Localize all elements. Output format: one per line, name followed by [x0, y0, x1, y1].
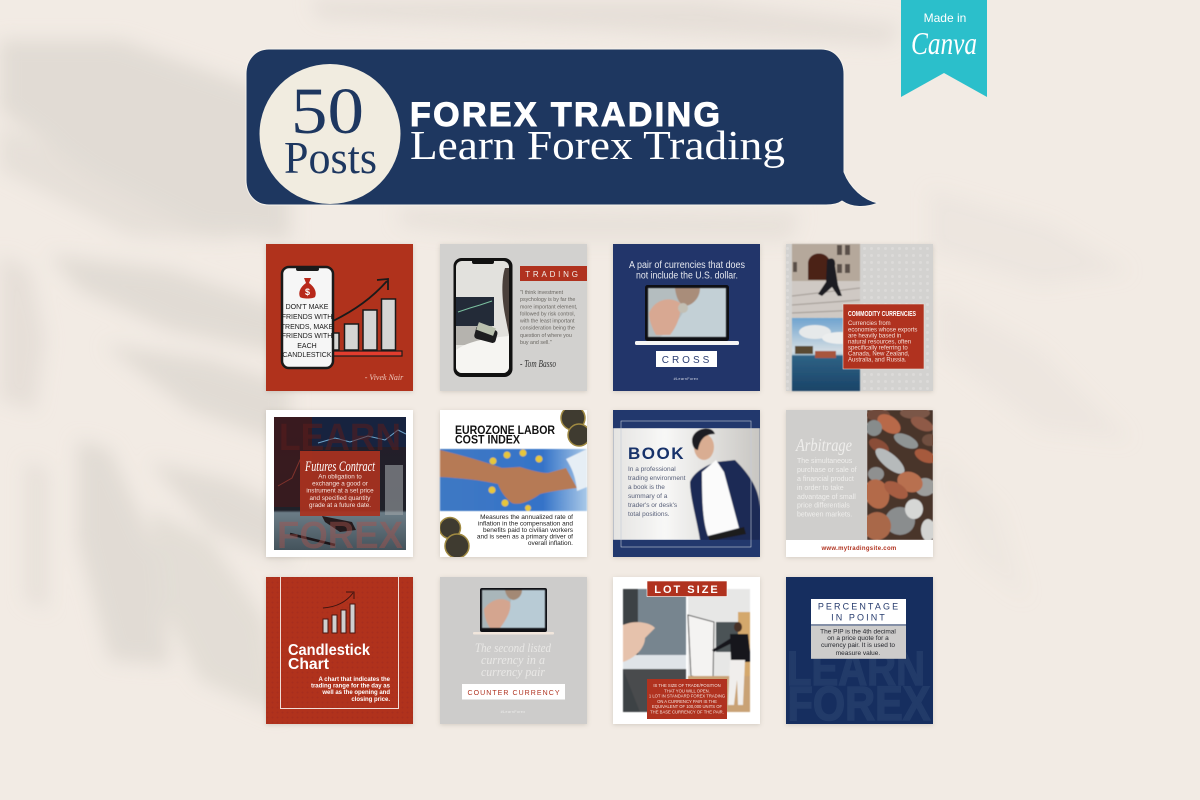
photo: businessman walking — [792, 244, 860, 318]
post 5: futures contract — [266, 410, 413, 557]
heading box — [811, 599, 906, 624]
heading: EUROZONE LABOR — [455, 425, 556, 437]
post 8: arbitrage — [786, 407, 938, 557]
definition box: Canada, New Zealand, — [848, 352, 910, 358]
bar chart with arrow — [333, 279, 402, 356]
laptop with coin photo — [635, 285, 739, 345]
phone with money bag and quote: FRIENDS WITH — [282, 314, 332, 321]
definition box: and specified quantity — [310, 495, 371, 502]
definition text: and is seen as a primary driver of — [477, 534, 573, 540]
quote text: question of where you — [520, 333, 572, 339]
post 1: candlestick advice — [266, 244, 413, 391]
heading: Candlestick — [288, 642, 370, 659]
label box: COUNTER CURRENCY — [468, 690, 560, 697]
definition box: on a price quote for a — [827, 635, 889, 642]
definition box: Futures Contract — [304, 459, 376, 475]
phone with money bag and quote — [281, 267, 334, 368]
hashtag: #LearnForex — [674, 377, 698, 381]
post 10: counter currency — [440, 577, 587, 724]
definition text: summary of a — [628, 493, 668, 500]
definition box: Australia, and Russia. — [848, 358, 907, 364]
cross label box — [656, 351, 717, 367]
heading — [455, 425, 556, 446]
definition box — [811, 624, 906, 659]
frame — [621, 421, 751, 547]
definition box: THAT YOU WILL OPEN. — [664, 688, 710, 694]
definition box: specifically referring to — [848, 346, 908, 352]
definition text — [311, 677, 391, 703]
definition text: advantage of small — [797, 494, 856, 501]
definition text: overall inflation. — [528, 540, 573, 547]
quote text: "I think investment — [520, 290, 564, 296]
post 6: eurozone labor cost index — [440, 406, 590, 558]
script definition: The second listed — [475, 640, 551, 655]
phone with money bag and quote: DON'T MAKE — [286, 304, 329, 311]
heading: COST INDEX — [455, 434, 520, 446]
photo: presenter at flip chart — [688, 589, 750, 712]
definition text: price differentials — [797, 502, 850, 510]
phone with money bag and quote: EACH — [297, 343, 317, 350]
definition text: between markets. — [797, 512, 852, 518]
definition box: IS THE SIZE OF TRADE/POSITION — [653, 683, 721, 688]
definition box: THE BASE CURRENCY OF THE PAIR. — [650, 710, 724, 714]
post 3: cross — [613, 244, 760, 391]
definition box: 1 LOT IN STANDARD FOREX TRADING — [649, 694, 725, 698]
definition text: trading environment — [628, 475, 686, 482]
script definition: currency in a — [481, 652, 545, 667]
definition box: natural resources, often — [848, 340, 911, 346]
photo: hand over laptop — [623, 589, 686, 712]
definition box: COMMODITY CURRENCIES — [848, 309, 916, 318]
definition text — [797, 458, 857, 518]
trading band — [520, 266, 587, 281]
man in suit photo — [613, 428, 760, 541]
definition box — [300, 451, 380, 516]
script definition: currency pair — [481, 664, 546, 679]
definition text: in order to take — [797, 485, 844, 492]
title band — [647, 581, 727, 596]
definition text — [477, 514, 574, 547]
definition text: A pair of currencies that does — [629, 260, 745, 271]
definition box: measure value. — [836, 650, 880, 657]
watermark: LEARN — [279, 417, 401, 459]
heading box: PERCENTAGE — [818, 602, 900, 612]
post 12: percentage in point — [786, 577, 933, 731]
coins — [440, 406, 590, 558]
definition text: inflation in the compensation and — [478, 520, 573, 528]
quote text — [520, 290, 577, 346]
definition box: exchange a good or — [312, 480, 368, 488]
badge: 50 Posts — [260, 64, 400, 204]
post 9: candlestick chart — [266, 577, 413, 724]
definition text: a book is the — [628, 484, 665, 491]
definition text — [628, 466, 686, 518]
watermark — [789, 651, 931, 721]
heading box: IN POINT — [831, 612, 887, 622]
watermark: LEARN — [787, 643, 925, 696]
heading: Forex Trading: FOREX TRADING — [410, 96, 720, 134]
definition box: EQUIVALENT OF 100,000 UNITS OF — [652, 704, 723, 709]
definition box: Currencies from — [848, 321, 891, 327]
watermark: FOREX — [277, 515, 404, 557]
definition text: total positions. — [628, 511, 670, 518]
definition box: ON A CURRENCY PAIR IS THE — [657, 699, 717, 704]
candlestick icon — [323, 592, 355, 633]
heading — [288, 642, 370, 673]
definition text: well as the opening and — [321, 690, 390, 696]
label box — [462, 684, 565, 700]
phone with trader photo — [454, 258, 512, 377]
coins photo — [867, 410, 933, 540]
made in Canva ribbon — [901, 0, 987, 97]
post 7: book — [613, 410, 760, 557]
definition text: a financial product — [797, 476, 854, 483]
quote text: psychology is by far the — [520, 297, 575, 303]
definition text: benefits paid to civilian workers — [483, 527, 574, 534]
quote text: buy and sell." — [520, 340, 552, 346]
quote text: consideration being the — [520, 326, 575, 332]
definition box: grade at a future date. — [309, 502, 371, 509]
badge: 50 Posts: 50 — [291, 75, 364, 148]
laptop with coin photo — [473, 588, 554, 634]
heading: Chart — [288, 656, 329, 673]
definition text: Measures the annualized rate of — [480, 514, 573, 521]
watermark — [280, 424, 402, 548]
definition text: trading range for the day as — [311, 684, 391, 690]
subheading: Learn Forex Trading: Learn Forex Trading — [410, 122, 785, 168]
quote text: more important element, — [520, 304, 577, 310]
definition box: An obligation to — [318, 474, 362, 480]
definition text: A chart that indicates the — [319, 677, 391, 683]
phone with money bag and quote: CANDLESTICK — [282, 352, 332, 359]
frame — [280, 577, 398, 708]
hashtag: #LearnForex — [501, 710, 525, 714]
definition box — [843, 304, 924, 369]
made in Canva ribbon: Made in — [924, 11, 966, 25]
signature: - Tom Basso — [520, 358, 556, 370]
signature: - Vivek Nair — [365, 373, 404, 382]
definition box: are heavily based in — [848, 334, 901, 340]
definition box: instrument at a set price — [306, 488, 374, 494]
definition text: The simultaneous — [797, 458, 853, 465]
trading band: TRADING — [525, 270, 581, 279]
cross label box: CROSS — [662, 355, 712, 366]
definition text: closing price. — [351, 697, 390, 703]
heading: BOOK — [628, 444, 685, 463]
phone with money bag and quote: FRIENDS WITH — [282, 333, 332, 340]
dark chart photo — [274, 417, 406, 557]
post 11: lot size — [613, 577, 760, 724]
phone with money bag and quote: $ — [305, 287, 310, 297]
script definition — [475, 640, 551, 679]
badge: 50 Posts: Posts — [284, 133, 377, 183]
heading: Arbitrage — [795, 435, 852, 455]
definition box: economies whose exports — [848, 328, 917, 334]
definition text: trader's or desk's — [628, 502, 678, 509]
definition text: purchase or sale of — [797, 467, 857, 474]
definition text: In a professional — [628, 466, 676, 473]
made in Canva ribbon: Canva — [911, 25, 977, 61]
handshake photo — [440, 449, 587, 511]
watermark: FOREX — [788, 678, 930, 731]
title band: LOT SIZE — [654, 584, 720, 596]
post 4: commodity currencies — [786, 244, 933, 391]
photo: offshore rig — [792, 318, 860, 391]
definition box: currency pair. It is used to — [821, 642, 895, 649]
quote text: followed by risk control, — [520, 312, 575, 318]
header speech bubble — [246, 49, 878, 207]
quote text: with the least important — [520, 318, 575, 324]
definition box — [647, 679, 727, 719]
post 2: trading quote — [440, 244, 587, 391]
phone with money bag and quote: TRENDS, MAKE — [281, 324, 334, 331]
definition text: not include the U.S. dollar. — [636, 270, 738, 282]
definition text — [629, 260, 745, 282]
website: www.mytradingsite.com — [820, 546, 897, 552]
definition box: The PIP is the 4th decimal — [820, 628, 896, 636]
